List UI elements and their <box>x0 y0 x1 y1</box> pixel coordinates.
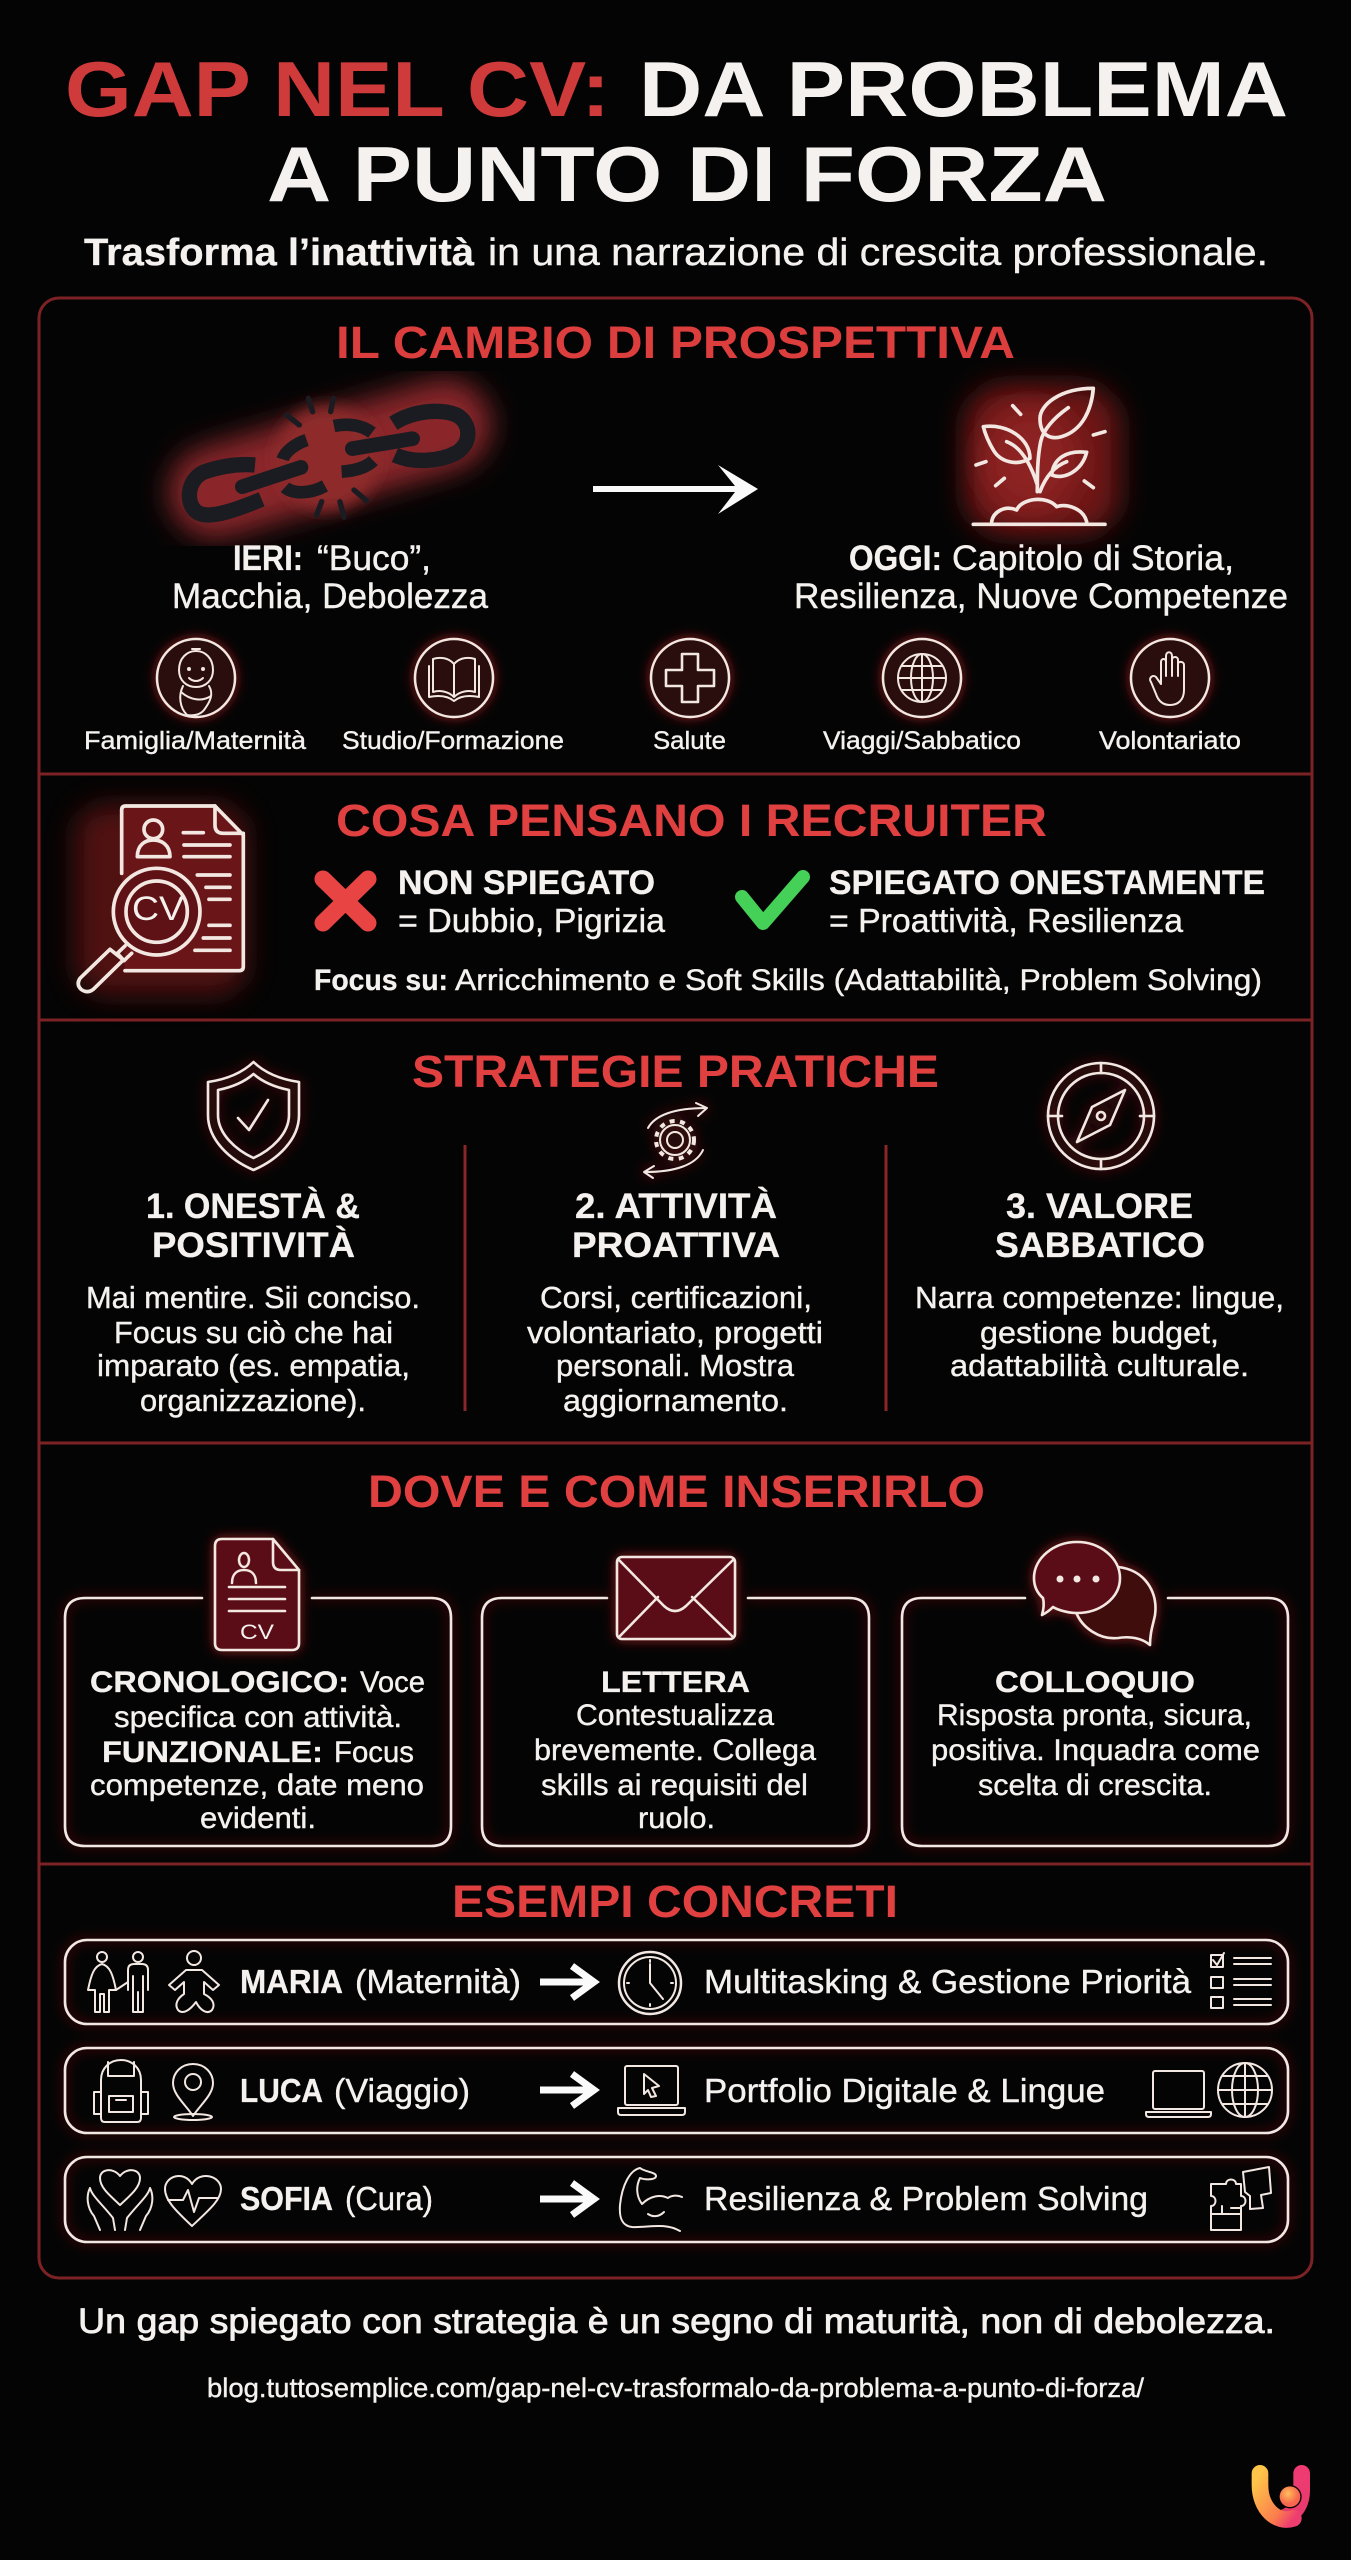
icon: growing plant <box>965 385 1120 535</box>
text: lettera body: brevemente. Collega <box>534 1734 816 1767</box>
strategy 3: sabbatical <box>915 1063 1284 1383</box>
text: oggi <box>794 539 1288 616</box>
text: sofia: SOFIA <box>240 2180 333 2217</box>
icon: puzzle <box>1211 2167 1271 2230</box>
labels: gap reasons: Salute <box>653 727 726 755</box>
strategy 2: proactive <box>527 1103 823 1418</box>
text: strategy 1 body: organizzazione). <box>140 1383 366 1418</box>
icon: envelope <box>617 1557 735 1639</box>
arrow <box>540 1966 594 1998</box>
text: cronologico body: specifica con attività. <box>114 1701 402 1734</box>
card outline <box>902 1598 1288 1846</box>
strategy 1: honesty <box>86 1062 420 1418</box>
text: lettera body: Contestualizza <box>576 1699 774 1732</box>
row: maria <box>65 1940 1288 2024</box>
icon: speech bubbles <box>1034 1542 1155 1645</box>
icon: shield <box>208 1062 299 1170</box>
icon: globe <box>1218 2063 1272 2117</box>
icon: family <box>88 1952 148 2012</box>
row outline <box>65 2157 1288 2242</box>
icon: location pin <box>173 2064 213 2120</box>
subtitle <box>84 232 1268 274</box>
text: lettera body: LETTERA <box>601 1666 750 1699</box>
logo <box>1260 2473 1302 2519</box>
text: non spiegato: = Dubbio, Pigrizia <box>398 902 666 939</box>
icon: checklist <box>1211 1953 1271 2008</box>
heading: attivita proattiva <box>572 1186 780 1265</box>
heading: dove e come inserirlo: DOVE E COME INSERIRLO <box>368 1466 985 1517</box>
text: focus su: Focus su: <box>314 964 448 997</box>
heading: esempi concreti: ESEMPI CONCRETI <box>452 1876 898 1927</box>
text: colloquio body <box>931 1666 1260 1802</box>
arrow <box>540 2183 594 2215</box>
panel: strategie pratiche <box>86 1046 1284 1418</box>
text: strategy 3 body <box>915 1280 1284 1383</box>
text: maria <box>240 1963 521 2000</box>
heading: il cambio di prospettiva: IL CAMBIO DI PROSPETTIVA <box>336 317 1015 368</box>
text: strategy 2 body <box>527 1280 823 1418</box>
text: strategy 2 body: personali. Mostra <box>556 1348 795 1383</box>
panel: esempi concreti <box>65 1876 1288 2242</box>
text: colloquio body: positiva. Inquadra come <box>931 1734 1260 1767</box>
text: luca: LUCA <box>240 2072 323 2109</box>
subtitle: in una narrazione di crescita professionale. <box>488 232 1268 274</box>
closing statement: Un gap spiegato con strategia è un segno di maturità, non di debolezza. <box>78 2302 1275 2341</box>
text: spiegato onestamente: SPIEGATO ONESTAMENTE <box>829 864 1265 902</box>
text: non spiegato: NON SPIEGATO <box>398 864 655 902</box>
text: cronologico body: FUNZIONALE: <box>102 1736 323 1769</box>
text: strategy 3 body: Narra competenze: lingue, <box>915 1280 1284 1315</box>
labels: gap reasons: Volontariato <box>1099 727 1241 755</box>
text: portfolio: Portfolio Digitale & Lingue <box>704 2072 1105 2109</box>
text: lettera body: ruolo. <box>638 1802 715 1835</box>
row: luca <box>65 2048 1288 2133</box>
row: sofia <box>65 2157 1288 2242</box>
icon: baby <box>169 1951 219 2012</box>
icon: red cross mark <box>323 879 368 923</box>
icon: medical cross <box>651 639 729 717</box>
text: strategy 3 body: adattabilità culturale. <box>950 1348 1249 1383</box>
text: strategy 2 body: volontariato, progetti <box>527 1315 823 1350</box>
icon: cv under magnifier: CV <box>132 890 184 928</box>
text: luca: (Viaggio) <box>334 2072 470 2109</box>
heading: onesta e positivita <box>146 1186 360 1265</box>
text: resilienza: Resilienza & Problem Solving <box>704 2180 1148 2217</box>
text: ieri: Macchia, Debolezza <box>172 577 489 616</box>
text: focus su: Arricchimento e Soft Skills (Adattabilità, Problem Solving) <box>455 964 1262 997</box>
text: strategy 1 body: imparato (es. empatia, <box>97 1348 410 1383</box>
text: colloquio body: COLLOQUIO <box>995 1666 1195 1699</box>
labels: gap reasons: Viaggi/Sabbatico <box>823 727 1021 755</box>
text: strategy 2 body: aggiornamento. <box>563 1383 788 1418</box>
icon: compass <box>1048 1063 1154 1169</box>
icon: backpack <box>94 2060 148 2122</box>
text: lettera body: skills ai requisiti del <box>541 1769 808 1802</box>
heading: valore sabbatico <box>995 1187 1205 1265</box>
icon: clock <box>619 1952 681 2014</box>
text: sofia <box>240 2180 433 2217</box>
title: DA PROBLEMA <box>639 45 1288 133</box>
icon: cv document <box>215 1539 299 1650</box>
text: cronologico body <box>90 1666 425 1835</box>
labels: gap reasons <box>84 727 1241 755</box>
title: GAP NEL CV: <box>65 45 610 133</box>
text: non spiegato <box>398 864 666 939</box>
icon: green check mark <box>742 877 803 923</box>
card: lettera <box>482 1557 869 1846</box>
heading: onesta e positivita: POSITIVITÀ <box>152 1225 355 1265</box>
card: cronologico: CV <box>240 1621 274 1644</box>
icon: laptop <box>1146 2071 1211 2117</box>
heading: cosa pensano i recruiter: COSA PENSANO I RECRUITER <box>336 795 1047 846</box>
text: maria: MARIA <box>240 1963 343 2000</box>
icon: laptop with cursor <box>618 2066 685 2115</box>
heading: attivita proattiva: 2. ATTIVITÀ <box>575 1186 777 1226</box>
text: strategy 3 body: gestione budget, <box>980 1315 1219 1350</box>
text: cronologico body: Focus <box>334 1736 414 1769</box>
heading: valore sabbatico: 3. VALORE <box>1006 1187 1193 1226</box>
panel: il cambio di prospettiva <box>84 317 1288 755</box>
heading: attivita proattiva: PROATTIVA <box>572 1226 780 1265</box>
panel: dove e come inserirlo <box>65 1466 1288 1846</box>
text: multitasking: Multitasking & Gestione Priorità <box>704 1963 1192 2000</box>
icon: cv under magnifier <box>75 805 247 995</box>
text: colloquio body: scelta di crescita. <box>978 1769 1212 1802</box>
subtitle: Trasforma l’inattività <box>84 232 475 274</box>
column dividers <box>465 1145 886 1411</box>
text: ieri <box>172 539 489 616</box>
labels: gap reasons: Studio/Formazione <box>342 727 564 755</box>
text: luca <box>240 2072 470 2109</box>
icon row: gap reasons <box>157 639 1209 717</box>
text: cronologico body: evidenti. <box>200 1802 316 1835</box>
text: oggi: OGGI: <box>849 539 942 578</box>
card: colloquio <box>902 1542 1288 1846</box>
icon: raised hand <box>1131 639 1209 717</box>
labels: gap reasons: Famiglia/Maternità <box>84 727 306 755</box>
text: lettera body <box>534 1666 816 1835</box>
title <box>65 45 1288 218</box>
main frame <box>39 298 1312 2278</box>
row outline <box>65 1940 1288 2024</box>
text: strategy 2 body: Corsi, certificazioni, <box>540 1280 812 1315</box>
icon: book <box>415 639 493 717</box>
card: cronologico <box>65 1539 451 1846</box>
text: ieri: “Buco”, <box>317 539 431 578</box>
icon: heart with pulse <box>165 2176 221 2226</box>
text: cronologico body: competenze, date meno <box>90 1769 424 1802</box>
heading: onesta e positivita: 1. ONESTÀ & <box>146 1186 360 1226</box>
row outline <box>65 2048 1288 2133</box>
icon: gear with arrows <box>644 1103 707 1178</box>
text: oggi: Capitolo di Storia, <box>952 539 1234 578</box>
text: cronologico body: Voce <box>360 1666 425 1699</box>
icon: globe <box>883 639 961 717</box>
card outline <box>482 1598 869 1846</box>
heading: valore sabbatico: SABBATICO <box>995 1226 1205 1265</box>
text: ieri: IERI: <box>233 539 303 578</box>
text: spiegato onestamente <box>829 864 1265 939</box>
text: sofia: (Cura) <box>345 2180 433 2217</box>
arrow <box>540 2074 594 2106</box>
source url: blog.tuttosemplice.com/gap-nel-cv-trasformalo-da-problema-a-punto-di-forza/ <box>207 2373 1145 2403</box>
icon: broken chain <box>189 398 468 517</box>
text: colloquio body: Risposta pronta, sicura, <box>937 1699 1252 1732</box>
text: maria: (Maternità) <box>355 1963 521 2000</box>
card outline <box>65 1598 451 1846</box>
text: oggi: Resilienza, Nuove Competenze <box>794 577 1288 616</box>
title: A PUNTO DI FORZA <box>267 130 1107 218</box>
text: strategy 1 body: Focus su ciò che hai <box>114 1315 393 1350</box>
text: spiegato onestamente: = Proattività, Resilienza <box>829 902 1184 939</box>
arrow: from yesterday to today <box>593 465 758 514</box>
icon: baby <box>157 639 235 717</box>
panel: cosa pensano i recruiter <box>75 795 1265 997</box>
heading: strategie pratiche: STRATEGIE PRATICHE <box>412 1046 939 1097</box>
text: strategy 1 body: Mai mentire. Sii conciso. <box>86 1280 420 1315</box>
text: strategy 1 body <box>86 1280 420 1418</box>
text: cronologico body: CRONOLOGICO: <box>90 1666 349 1699</box>
icon: flexed arm <box>620 2168 682 2231</box>
icon: hands with heart <box>88 2170 152 2230</box>
